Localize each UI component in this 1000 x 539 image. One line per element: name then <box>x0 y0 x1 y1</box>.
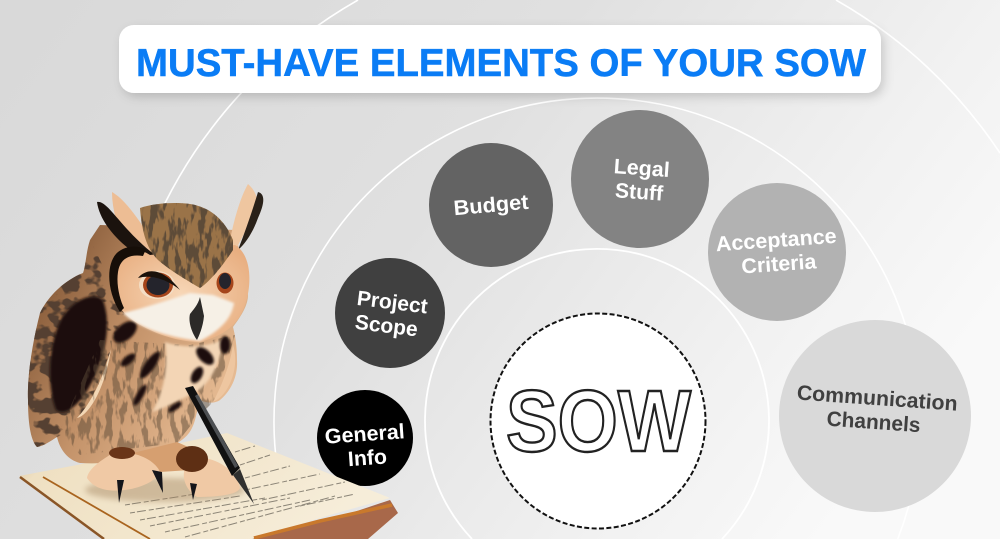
owl body <box>28 225 248 463</box>
white chin <box>123 293 234 341</box>
bubble: Acceptance Criteria <box>708 183 846 321</box>
bubble: Legal Stuff: Stuff <box>614 179 665 206</box>
bubble: Budget: Budget <box>453 191 529 220</box>
tan side feather <box>213 345 235 402</box>
title banner <box>119 25 881 93</box>
feet <box>87 442 240 503</box>
notebook <box>19 433 398 539</box>
center circle: SOW: SOW <box>506 373 692 470</box>
bubble: Project Scope: Scope <box>354 311 419 341</box>
shadow on page under feet <box>85 478 245 502</box>
bubble: General Info: General <box>324 420 405 449</box>
pen <box>185 386 254 504</box>
bubble: Budget <box>429 143 553 267</box>
beak <box>189 297 204 340</box>
wing mottling <box>28 240 125 447</box>
center circle: SOW <box>490 314 706 528</box>
bubble: Acceptance Criteria: Criteria <box>741 250 817 278</box>
pale feather strip <box>77 349 111 418</box>
bubble: Communication Channels: Channels <box>826 408 921 437</box>
bubble: Acceptance Criteria: Acceptance <box>715 225 837 256</box>
bubble: Communication Channels: Communication <box>796 382 958 416</box>
title: MUST-HAVE ELEMENTS OF YOUR SOW <box>136 42 866 85</box>
head crown <box>140 203 233 288</box>
black facial arc <box>109 247 146 312</box>
bubble: Legal Stuff <box>571 110 709 248</box>
belly and chest mottling <box>60 335 235 455</box>
illustration: owl writing in a notebook <box>19 184 398 539</box>
bubble: Legal Stuff: Legal <box>613 155 670 182</box>
eyes <box>138 271 234 299</box>
bubble: General Info: Info <box>347 446 388 471</box>
face disc <box>112 245 249 342</box>
bubble: Communication Channels <box>779 320 971 512</box>
bubble: Project Scope <box>335 258 445 368</box>
chest markings <box>109 317 230 414</box>
pale chest <box>152 340 222 412</box>
bubble: General Info <box>317 390 413 486</box>
bubble: Project Scope: Project <box>356 287 429 318</box>
dark wing patch <box>50 296 107 412</box>
ear tufts <box>112 192 155 255</box>
